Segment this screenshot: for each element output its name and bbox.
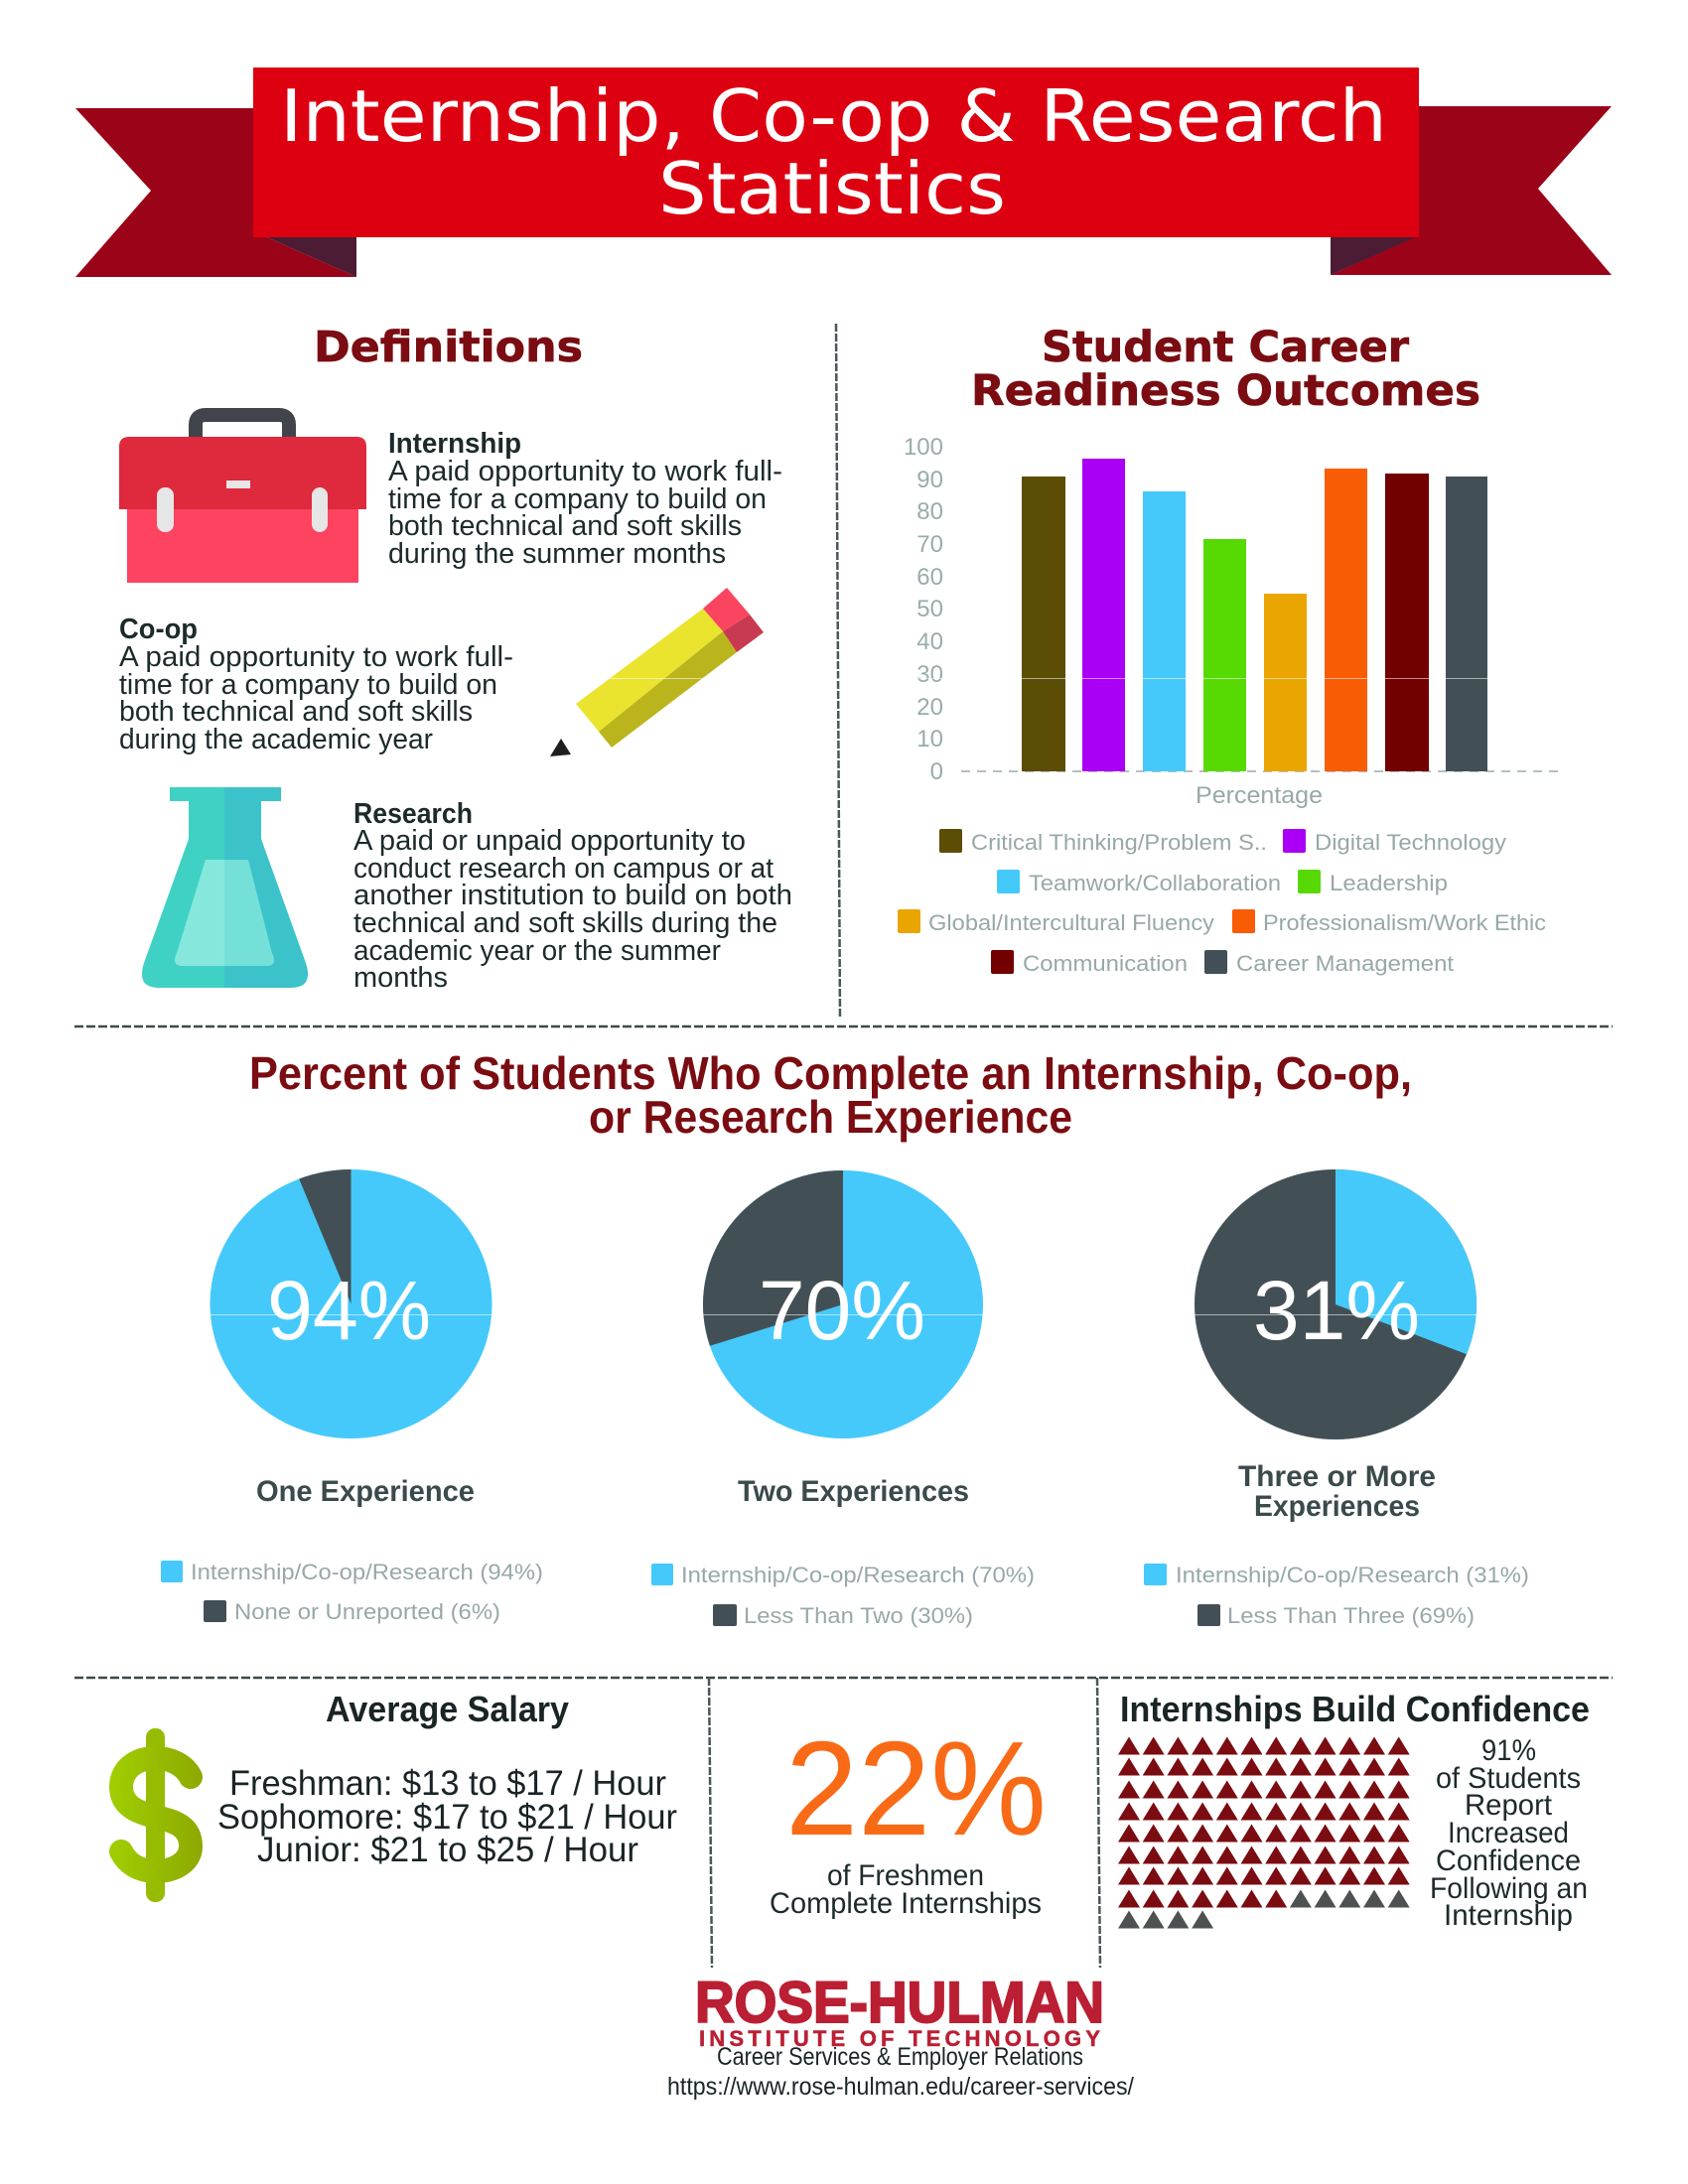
chart legend: Career Management xyxy=(1236,951,1454,976)
text: internship definition: time for a company to build on xyxy=(388,483,767,515)
title xyxy=(280,74,1387,230)
icon: flask xyxy=(142,787,308,988)
text: co-op definition: Co-op xyxy=(119,614,198,645)
caption: 91 percent report confidence: of Students xyxy=(1436,1762,1581,1795)
footer: logo and contact xyxy=(667,1971,1134,2101)
pie chart: one experience: 94% xyxy=(267,1264,431,1357)
legend: two experiences: Less Than Two (30%) xyxy=(744,1603,973,1628)
text: internship definition: Internship xyxy=(388,428,521,460)
caption: 91 percent report confidence: 91% xyxy=(1481,1734,1536,1767)
heading: percent of students: or Research Experience xyxy=(589,1091,1072,1143)
chart legend: Professionalism/Work Ethic xyxy=(1263,910,1546,935)
heading: average salary: Average Salary xyxy=(326,1689,569,1729)
panel: definitions xyxy=(119,323,792,994)
label: two experiences: Two Experiences xyxy=(738,1475,969,1508)
caption: 91 percent report confidence: Internship xyxy=(1444,1899,1573,1932)
pie chart: three or more experiences xyxy=(1195,1169,1477,1439)
logo: rose-hulman: INSTITUTE OF TECHNOLOGY xyxy=(699,2026,1100,2051)
heading: percent of students xyxy=(249,1047,1412,1143)
label: three or more experiences: Experiences xyxy=(1254,1490,1420,1523)
text: research definition: conduct research on campus or at xyxy=(353,853,774,885)
salary ranges xyxy=(217,1764,677,1869)
heading: percent of students: Percent of Students Who Complete an Internship, Co-op, xyxy=(249,1047,1412,1099)
heading: definitions: Definitions xyxy=(314,323,583,372)
text: research definition: academic year or the summer xyxy=(353,935,721,967)
pie chart: two experiences: 70% xyxy=(759,1264,925,1357)
caption: freshmen internships xyxy=(770,1859,1042,1920)
pie chart: one experience xyxy=(211,1169,492,1438)
caption: 91 percent report confidence: Confidence xyxy=(1436,1844,1581,1877)
stat: 22%: 22% xyxy=(785,1713,1047,1863)
panel: internships build confidence xyxy=(1118,1689,1590,1932)
heading: career readiness: Student Career xyxy=(1042,323,1410,372)
chart legend: Global/Intercultural Fluency xyxy=(928,910,1214,935)
text: co-op definition: time for a company to build on xyxy=(119,669,497,701)
title: Statistics xyxy=(658,147,1006,230)
caption: freshmen internships: Complete Internships xyxy=(770,1887,1042,1920)
caption: freshmen internships: of Freshmen xyxy=(827,1859,984,1892)
text: co-op definition: both technical and soft skills xyxy=(119,696,473,728)
legend: two experiences: Internship/Co-op/Research (70%) xyxy=(681,1563,1035,1587)
legend: three or more experiences: Internship/Co-op/Research (31%) xyxy=(1176,1563,1529,1587)
legend: three or more experiences: Less Than Three (69%) xyxy=(1227,1603,1475,1628)
salary ranges: Freshman: $13 to $17 / Hour xyxy=(229,1764,666,1803)
chart legend: Teamwork/Collaboration xyxy=(1029,871,1281,895)
caption: 91 percent report confidence: Increased xyxy=(1448,1817,1569,1849)
text: internship definition: during the summer months xyxy=(388,538,726,570)
panel: average salary xyxy=(121,1689,677,1902)
legend: one experience: Internship/Co-op/Research (94%) xyxy=(191,1560,543,1584)
panel: percent of students xyxy=(161,1047,1529,1628)
text: research definition: another institution to build on both xyxy=(353,880,792,911)
text: research definition: A paid or unpaid opportunity to xyxy=(353,825,746,857)
text: research definition: months xyxy=(353,962,448,994)
text: research definition: Research xyxy=(353,798,473,830)
bar chart: 70 xyxy=(916,531,943,558)
pie chart: three or more experiences: 31% xyxy=(1253,1264,1420,1357)
text: internship definition: both technical and soft skills xyxy=(388,510,742,542)
bar chart: 10 xyxy=(916,726,943,752)
salary ranges: Sophomore: $17 to $21 / Hour xyxy=(217,1798,677,1837)
panel: career readiness outcomes xyxy=(898,323,1561,976)
chart legend: Leadership xyxy=(1330,871,1448,895)
bar chart: 80 xyxy=(916,498,943,525)
panel: freshmen statistic xyxy=(770,1713,1047,1920)
bar chart: 40 xyxy=(916,628,943,655)
icon: dollar sign xyxy=(121,1728,191,1902)
text: co-op definition xyxy=(119,614,513,755)
text: research definition xyxy=(353,798,792,994)
chart legend: Communication xyxy=(1023,951,1188,976)
chart legend xyxy=(898,829,1546,976)
text: co-op definition: A paid opportunity to work full- xyxy=(119,641,513,673)
bar chart: 60 xyxy=(916,564,943,591)
legend: three or more experiences xyxy=(1144,1563,1529,1628)
title: Internship, Co-op & Research xyxy=(280,74,1387,158)
chart legend: Critical Thinking/Problem S.. xyxy=(971,830,1267,855)
bar chart xyxy=(904,434,1561,809)
chart legend: Digital Technology xyxy=(1315,830,1506,855)
legend: one experience: None or Unreported (6%) xyxy=(234,1599,500,1624)
bar chart: 100 xyxy=(904,434,943,461)
icon: toolbox xyxy=(119,415,366,583)
legend: two experiences xyxy=(651,1563,1035,1628)
text: research definition: technical and soft skills during the xyxy=(353,907,777,939)
pictogram: 91 of 100 triangles xyxy=(1118,1737,1410,1928)
bar chart: 50 xyxy=(916,596,943,622)
contact: department: Career Services & Employer Relations xyxy=(717,2043,1083,2071)
caption: 91 percent report confidence: Report xyxy=(1465,1789,1553,1822)
icon: pencil xyxy=(550,588,764,756)
text: co-op definition: during the academic year xyxy=(119,724,433,755)
label: one experience: One Experience xyxy=(256,1475,475,1508)
bar chart: 30 xyxy=(916,661,943,688)
pie chart: two experiences xyxy=(703,1170,983,1438)
caption: 91 percent report confidence xyxy=(1430,1734,1588,1932)
logo: rose-hulman: ROSE-HULMAN xyxy=(695,1971,1104,2035)
salary ranges: Junior: $21 to $25 / Hour xyxy=(257,1831,638,1869)
bar chart: 20 xyxy=(916,694,943,721)
bar chart: 90 xyxy=(916,467,943,493)
heading: career readiness xyxy=(971,323,1480,416)
text: internship definition xyxy=(388,428,782,570)
contact: url: https://www.rose-hulman.edu/career-services/ xyxy=(667,2073,1134,2101)
title banner xyxy=(75,68,1612,277)
legend: one experience xyxy=(161,1560,543,1624)
label: three or more experiences xyxy=(1238,1460,1436,1523)
caption: 91 percent report confidence: Following an xyxy=(1430,1872,1588,1905)
heading: career readiness: Readiness Outcomes xyxy=(971,366,1480,416)
label: three or more experiences: Three or More xyxy=(1238,1460,1436,1493)
text: internship definition: A paid opportunity to work full- xyxy=(388,456,782,487)
heading: confidence: Internships Build Confidence xyxy=(1120,1689,1590,1729)
bar chart: Percentage xyxy=(1196,782,1323,809)
bar chart: 0 xyxy=(930,758,943,785)
